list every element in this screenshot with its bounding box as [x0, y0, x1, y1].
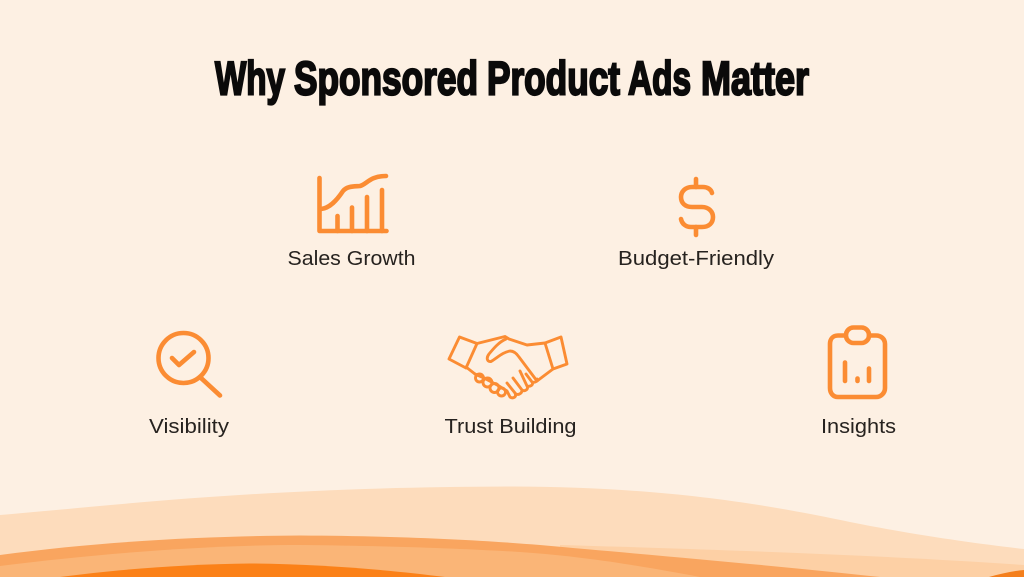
item: Insights: [821, 328, 896, 438]
title: Ads: [628, 52, 691, 104]
background waves: [0, 486, 1024, 577]
icon: clipboard with bars: [830, 328, 885, 397]
item: Visibility: [149, 333, 230, 438]
label: Sales Growth: Sales Growth: [288, 247, 416, 270]
title: Sponsored: [294, 52, 478, 104]
icon: growth chart: [320, 176, 386, 231]
icon: dollar sign: [681, 179, 713, 235]
icon: magnifier with check: [158, 333, 220, 396]
title: Matter: [701, 52, 809, 104]
title: Product: [487, 52, 620, 104]
title: [215, 52, 809, 104]
item: Trust Building: [444, 336, 576, 438]
label: Budget-Friendly: Budget-Friendly: [618, 247, 775, 270]
item: Sales Growth: [288, 176, 416, 270]
label: Visibility: Visibility: [149, 415, 230, 438]
icon: handshake: [449, 336, 567, 398]
title: Why: [215, 52, 285, 104]
label: Trust Building: Trust Building: [444, 415, 576, 438]
item: Budget-Friendly: [618, 179, 775, 270]
label: Insights: Insights: [821, 415, 896, 438]
